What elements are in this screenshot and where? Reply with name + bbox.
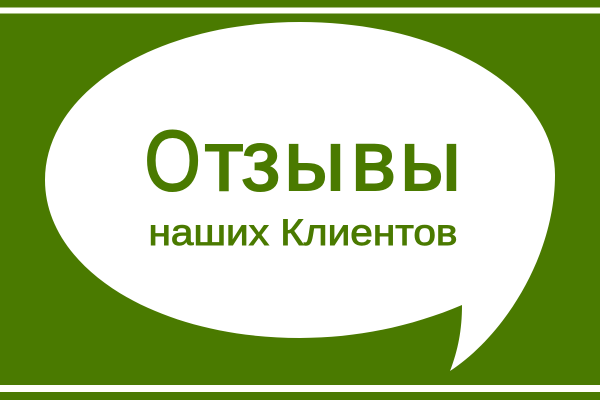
speech bubble [45,22,555,371]
subtitle: наших Клиентов [148,212,458,253]
title: О [145,113,201,208]
title: тзывы [204,114,461,209]
